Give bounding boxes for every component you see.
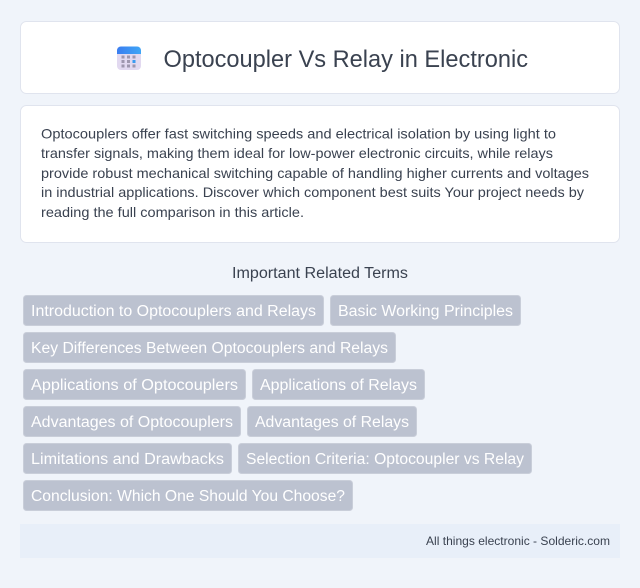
- tag: Conclusion: Which One Should You Choose?: [31, 488, 345, 505]
- tag: Applications of Optocouplers: [31, 377, 238, 394]
- panel: intro paragraph: [20, 106, 620, 242]
- tag: Advantages of Relays: [255, 414, 409, 431]
- footer: [20, 524, 620, 558]
- tag: [24, 296, 324, 326]
- footer text: All things electronic - Solderic.com: [426, 534, 610, 548]
- icon: calendar: [117, 46, 141, 70]
- tag: Selection Criteria: Optocoupler vs Relay: [246, 451, 524, 468]
- tag: Key Differences Between Optocouplers and Relays: [31, 340, 388, 357]
- title: Optocoupler Vs Relay in Electronic: [164, 46, 528, 73]
- text block: intro: reading the full comparison in this article.: [41, 204, 304, 220]
- tag: [252, 370, 424, 400]
- tag: [24, 332, 396, 362]
- tag: [248, 406, 416, 436]
- tag: Basic Working Principles: [338, 303, 513, 320]
- text block: intro: Optocouplers offer fast switching speeds and electrical isolation by using light to: [41, 126, 556, 142]
- tag: [24, 480, 352, 510]
- panel: title header: [20, 22, 620, 94]
- tag list: [24, 296, 532, 510]
- text block: intro: in industrial applications. Discover which component best suits Your project needs by: [41, 184, 584, 200]
- tag: Applications of Relays: [260, 377, 417, 394]
- text block: intro: transfer signals, making them ideal for low-power electronic circuits, while relays: [41, 145, 553, 161]
- tag: Advantages of Optocouplers: [31, 414, 233, 431]
- tag: [24, 406, 240, 436]
- tag: [330, 296, 520, 326]
- tag: [24, 370, 246, 400]
- tag: [24, 444, 232, 474]
- heading: related terms: Important Related Terms: [232, 265, 408, 282]
- text block: intro: provide robust mechanical switching capable of handling higher currents and voltages: [41, 165, 589, 181]
- tag: Limitations and Drawbacks: [31, 451, 224, 468]
- text block: intro: [41, 126, 589, 220]
- tag: Introduction to Optocouplers and Relays: [31, 303, 316, 320]
- tag: [238, 444, 532, 474]
